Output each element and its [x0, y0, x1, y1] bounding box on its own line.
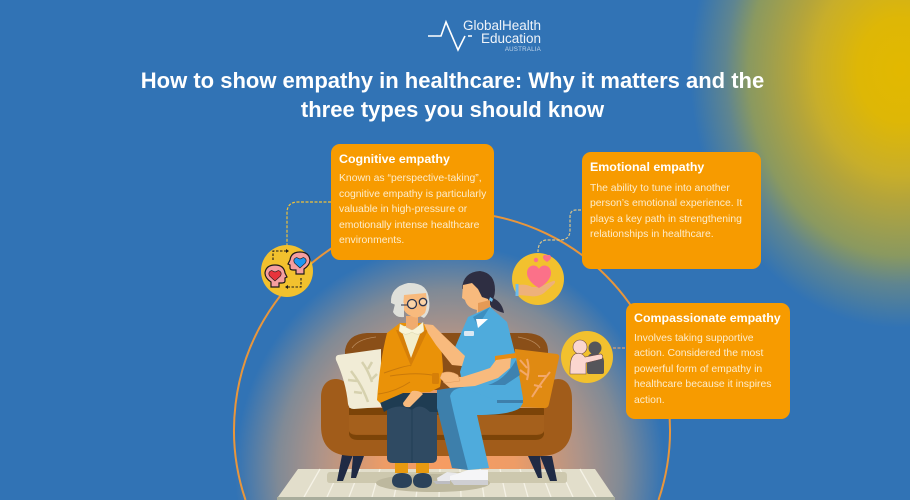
logo wordmark: AUSTRALIA [505, 46, 541, 53]
panel: compassionate empathy: action. [634, 395, 665, 406]
panel: compassionate empathy: powerful form of empathy in [634, 364, 762, 375]
panel: cognitive empathy: emotionally intense healthcare [339, 220, 479, 230]
title [141, 68, 764, 122]
panel: cognitive empathy: Known as “perspective-taking”, [339, 173, 482, 184]
panel: emotional empathy [582, 152, 761, 269]
panel: cognitive empathy: cognitive empathy is particularly [339, 188, 486, 200]
logo wordmark: Education [481, 30, 541, 46]
title: three types you should know [301, 97, 604, 122]
logo wordmark [463, 18, 541, 53]
panel: cognitive empathy: environments. [339, 235, 404, 246]
panel: emotional empathy: plays a key path in strengthening [590, 214, 742, 224]
panel: compassionate empathy: Involves taking supportive [634, 333, 754, 344]
panel: emotional empathy: The ability to tune into another [590, 182, 730, 194]
panel: compassionate empathy: Compassionate empathy [634, 311, 781, 325]
logo pulse mark [428, 20, 472, 52]
panel: cognitive empathy: valuable in high-pressure or [339, 204, 467, 215]
panel: cognitive empathy [331, 144, 494, 260]
panel: cognitive empathy: Cognitive empathy [339, 152, 450, 166]
panel: emotional empathy: relationships in healthcare. [590, 229, 714, 240]
panel: compassionate empathy: healthcare because it inspires [634, 379, 771, 390]
panel: emotional empathy: person’s emotional experience. It [590, 198, 742, 209]
panel: compassionate empathy: action. Considered the most [634, 348, 763, 359]
logo wordmark: GlobalHealth [463, 18, 541, 33]
logo [428, 18, 541, 53]
panel: emotional empathy: Emotional empathy [590, 160, 704, 174]
panel: compassionate empathy [626, 303, 790, 419]
title: How to show empathy in healthcare: Why it matters and the [141, 68, 764, 93]
